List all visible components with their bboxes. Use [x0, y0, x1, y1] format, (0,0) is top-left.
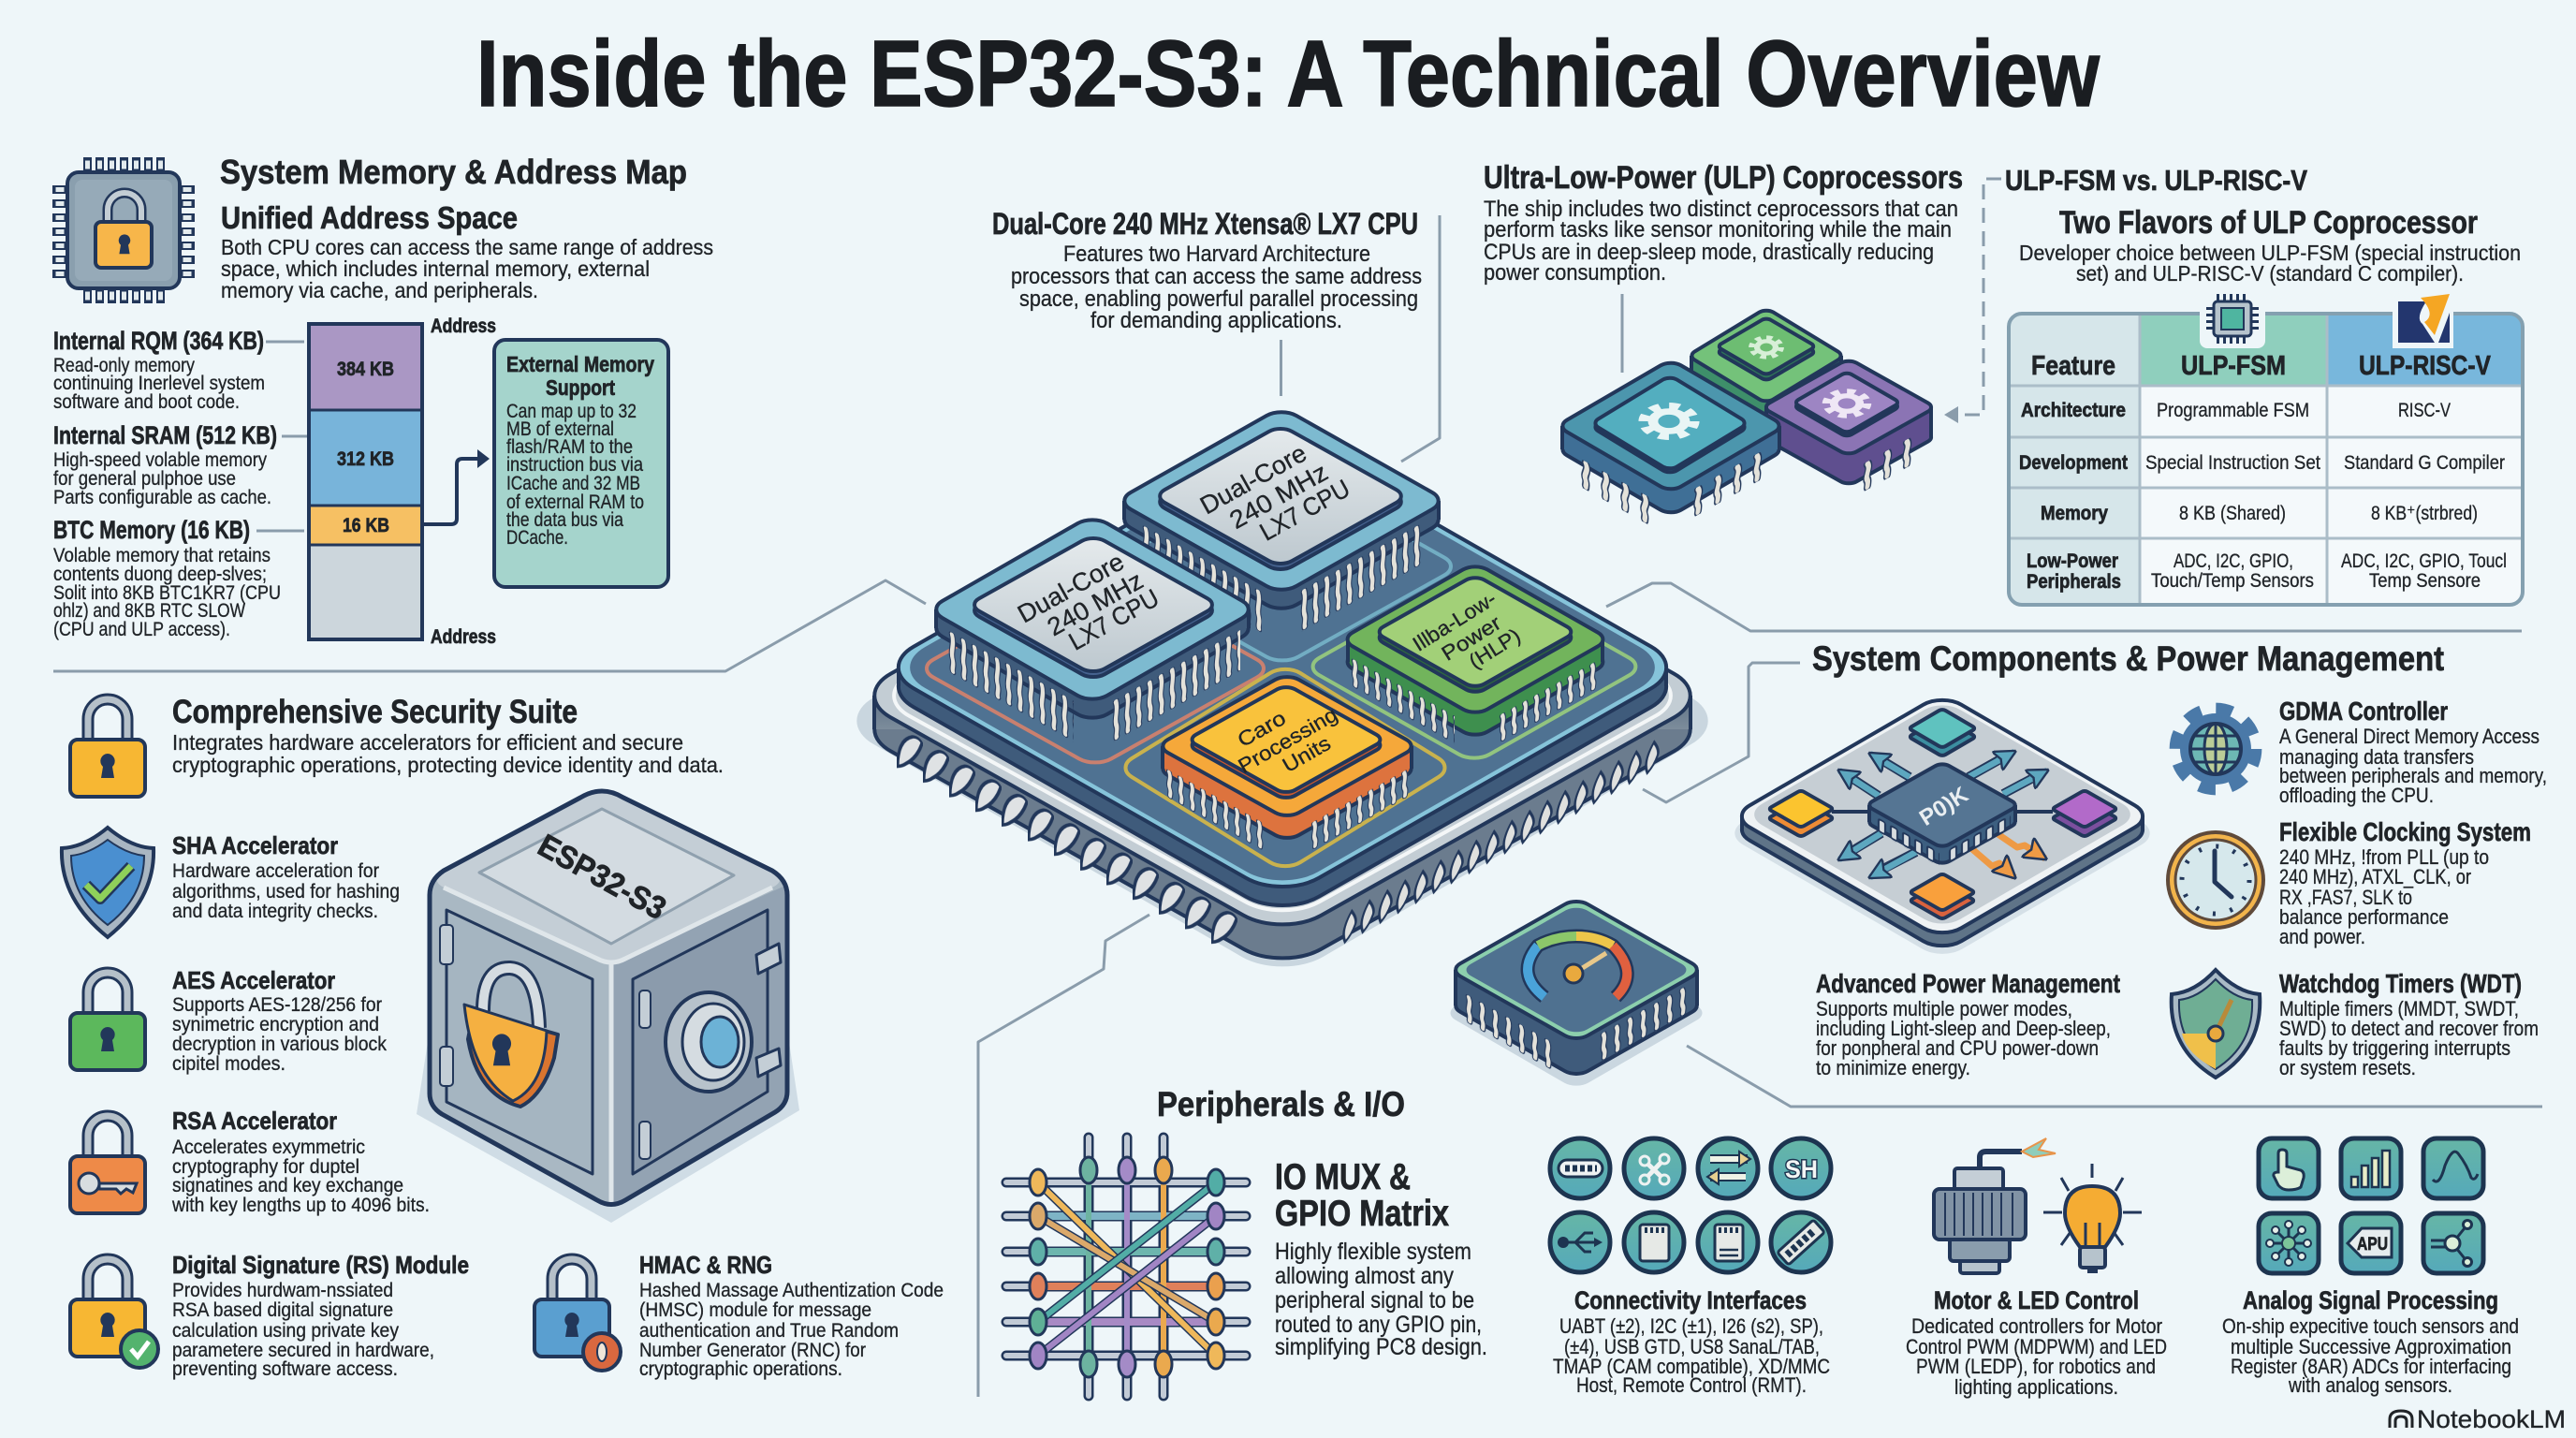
text block: GDMA controller: GDMA Controller [2279, 697, 2448, 726]
text block: RSA accelerator: RSA Accelerator [172, 1107, 337, 1135]
icons: analog signal processing: APU [2357, 1235, 2388, 1255]
text block: analog signal processing: multiple Successive Agproximation [2231, 1335, 2511, 1358]
label: internal ROM: Read-only memory [53, 355, 195, 376]
text block: advanced power management: to minimize energy. [1816, 1056, 1970, 1079]
callout: external memory support: of external RAM to [506, 492, 644, 513]
icon: AES padlock [70, 973, 145, 1070]
text block: RSA accelerator: with key lengths up to 4096 bits. [171, 1195, 430, 1216]
subheading: Two Flavors of ULP Coprocessor [2059, 205, 2478, 241]
text block: intro: memory via cache, and peripherals. [221, 278, 538, 302]
text block: RSA accelerator [171, 1107, 430, 1216]
label: internal SRAM [53, 421, 307, 508]
text block: AES accelerator: decryption in various block [172, 1034, 387, 1055]
text block: CPUs are in deep-sleep mode, drastically reducing [1484, 240, 1934, 265]
label: RTC memory: BTC Memory (16 KB) [53, 516, 250, 544]
comparison table: 8 KB (Shared) [2179, 503, 2286, 524]
connector: memory section to main chip [53, 580, 926, 671]
panel: security suite [62, 694, 944, 1380]
comparison table: Programmable FSM [2157, 400, 2309, 421]
icon: clock [2168, 832, 2263, 928]
connector: CPU heading to main chip [1401, 215, 1440, 462]
callout: external memory support: Support [546, 375, 615, 400]
comparison table [2009, 314, 2523, 605]
text block: motor and LED control: lighting applications. [1954, 1375, 2118, 1399]
callout: external memory support [494, 340, 668, 587]
icon: RISC-V logo [2393, 294, 2453, 348]
chip: core processing units: Units [1279, 731, 1335, 777]
text block: IO MUX and GPIO matrix: routed to any GPIO pin, [1275, 1312, 1482, 1338]
text block: watchdog timers: faults by triggering interrupts [2279, 1036, 2510, 1060]
text block: AES accelerator: synimetric encryption and [172, 1014, 379, 1035]
text block: connectivity interfaces: Connectivity Interfaces [1574, 1286, 1807, 1314]
text block: SHA accelerator [172, 831, 400, 922]
text block: analog signal processing [2222, 1286, 2519, 1397]
text block: digital signature module: parametere secured in hardware, [172, 1340, 434, 1361]
callout: external memory support: Can map up to 32 [506, 401, 637, 422]
branding: NotebookLM: NotebookLM [2417, 1405, 2566, 1433]
text block: HMAC and RNG: HMAC & RNG [639, 1251, 772, 1279]
illustration: ESP32-S3 safe: ESP32-S3 [532, 828, 672, 927]
text block: intro: cryptographic operations, protecting device identity and data. [172, 753, 724, 777]
arrow: RTC memory to external memory [422, 449, 490, 524]
text block: digital signature module: RSA based digital signature [172, 1299, 393, 1321]
text block: IO MUX and GPIO matrix [1275, 1157, 1487, 1360]
panel: system components and power management [1443, 639, 2547, 1090]
text block: IO MUX and GPIO matrix: allowing almost any [1275, 1263, 1454, 1289]
text block: connectivity interfaces: TMAP (CAM compatible), XD/MMC [1553, 1355, 1830, 1378]
text block: for demanding applications. [1090, 308, 1342, 333]
text block: AES accelerator [172, 966, 387, 1075]
text block: perform tasks like sensor monitoring while the main [1484, 217, 1952, 242]
icon: motor [1934, 1138, 2056, 1273]
callout: external memory support: MB of external [506, 418, 614, 440]
text block: GDMA controller: A General Direct Memory Access [2279, 725, 2539, 748]
text block: Developer choice between ULP-FSM (special instruction [2019, 241, 2521, 265]
text block: analog signal processing: Register (8AR) ADCs for interfacing [2231, 1355, 2511, 1378]
chip: power management gauge [1443, 898, 1709, 1090]
heading: System Memory & Address Map [220, 153, 687, 191]
icon: digital signature padlock [70, 1259, 158, 1368]
text block: HMAC and RNG: (HMSC) module for message [639, 1299, 871, 1321]
chip: green ULP [1688, 308, 1845, 443]
label: RTC memory: Volable memory that retains [53, 545, 271, 566]
connector: main chip to peripherals [978, 915, 1149, 1397]
heading: ULP-FSM vs. ULP-RISC-V [2005, 164, 2307, 197]
callout: external memory support: instruction bus via [506, 454, 643, 476]
text block [2019, 241, 2521, 286]
text block: analog signal processing: Analog Signal Processing [2243, 1286, 2498, 1314]
icon: SHA shield [62, 828, 154, 937]
panel: ULP-FSM vs ULP-RISC-V [1944, 164, 2523, 605]
text block: motor and LED control [1906, 1286, 2167, 1399]
label: internal SRAM: Parts configurable as cache. [53, 487, 271, 508]
icon: HMAC padlock [534, 1259, 621, 1371]
circuit board plate [877, 436, 1688, 917]
chip: back CPU core: LX7 CPU [1255, 474, 1354, 547]
comparison table: ULP-FSM [2181, 351, 2286, 381]
heading: Dual-Core 240 MHz Xtensa® LX7 CPU [992, 207, 1418, 241]
callout: external memory support: the data bus via [506, 509, 623, 531]
text block: IO MUX and GPIO matrix: simplifying PC8 design. [1275, 1334, 1487, 1360]
comparison table: ADC, I2C, GPIO, Toucl [2341, 550, 2507, 572]
text block: RSA accelerator: Accelerates exymmetric [172, 1137, 365, 1158]
text block: advanced power management [1816, 969, 2120, 1079]
illustration: central ESP32-S3 chip package [833, 407, 1732, 980]
chip: back CPU core: 240 MHz [1224, 458, 1333, 535]
comparison table: Architecture [2021, 400, 2126, 421]
label: internal SRAM: for general pulphoe use [53, 468, 236, 490]
label: internal SRAM: High-speed volable memory [53, 449, 267, 471]
panel: CPU description [992, 207, 1422, 333]
text block: advanced power management: for ponpheral and CPU power-down [1816, 1036, 2099, 1060]
icon: watchdog shield [2172, 970, 2260, 1078]
text block: HMAC and RNG: Number Generator (RNC) for [639, 1340, 866, 1361]
text block: HMAC and RNG: Hashed Massage Authentization Code [639, 1280, 944, 1301]
heading: Peripherals & I/O [1157, 1085, 1405, 1123]
chip: ultra-low-power [1340, 563, 1610, 744]
connector: main chip to system components divider [1606, 583, 2522, 631]
heading: System Components & Power Management [1812, 639, 2444, 678]
chart: memory map bar [309, 315, 496, 648]
chip: front CPU core: 240 MHz [1043, 566, 1148, 641]
comparison table: ULP-RISC-V [2359, 351, 2492, 381]
text block: motor and LED control: Motor & LED Control [1934, 1286, 2139, 1314]
text block: AES accelerator: AES Accelerator [172, 966, 335, 994]
text block: GDMA controller: offloading the CPU. [2279, 784, 2434, 807]
connector: gauge chip to bottom divider [1687, 1046, 2542, 1107]
comparison table: 8 KB⁺(strbred) [2371, 503, 2478, 524]
callout: external memory support: ICache and 32 MB [506, 473, 640, 494]
icon: ULP-FSM chip [2200, 290, 2265, 348]
text block: RSA accelerator: cryptography for duptel [172, 1156, 359, 1178]
chip: front CPU core [928, 515, 1257, 743]
text block: HMAC and RNG [639, 1251, 944, 1380]
title: Inside the ESP32-S3: A Technical Overview [476, 22, 2100, 126]
icons: connectivity interfaces: SH [1785, 1155, 1818, 1183]
chip: ultra-low-power: Illba-Low- [1409, 586, 1500, 656]
text block: motor and LED control: PWM (LEDP), for robotics and [1916, 1355, 2156, 1378]
illustration: GDMA bus board: P0)K [1915, 782, 1973, 831]
chart: memory map bar: 384 KB [337, 359, 394, 380]
icon: RSA padlock with key [70, 1116, 145, 1213]
chip: core processing units: Caro [1234, 706, 1290, 752]
text block: motor and LED control: Dedicated controllers for Motor [1911, 1314, 2162, 1338]
chip: purple ULP [1762, 359, 1936, 494]
chip: front CPU core: LX7 CPU [1064, 583, 1164, 656]
label: internal SRAM: Internal SRAM (512 KB) [53, 421, 277, 449]
text block: power consumption. [1484, 260, 1666, 286]
text block: flexible clocking system: balance performance [2279, 905, 2449, 929]
comparison table: Development [2019, 452, 2128, 474]
label: RTC memory [53, 516, 304, 640]
comparison table: Memory [2041, 503, 2108, 524]
label: RTC memory: contents duong deep-slves; [53, 564, 267, 585]
text block: connectivity interfaces: UABT (±2), I2C (±1), I26 (s2), SP), [1559, 1314, 1823, 1338]
chart: memory map bar: Address [431, 315, 496, 337]
text block: connectivity interfaces [1553, 1286, 1830, 1397]
text block: advanced power management: Advanced Power Management [1816, 969, 2120, 998]
package base [833, 454, 1732, 980]
text block: watchdog timers: SWD) to detect and recover from [2279, 1017, 2539, 1040]
callout: external memory support: flash/RAM to the [506, 436, 633, 458]
text block: SHA accelerator: and data integrity checks. [172, 901, 378, 922]
text block: AES accelerator: cipitel modes. [172, 1053, 285, 1075]
text block: GDMA controller [2279, 697, 2547, 807]
text block: digital signature module: Provides hurdwam-nssiated [172, 1280, 393, 1301]
icon: GDMA gear and globe [2178, 712, 2253, 786]
connector: CPU text to chip [1280, 340, 1282, 396]
chip: ultra-low-power: (HLP) [1465, 624, 1525, 673]
chip: front CPU core: Dual-Core [1013, 548, 1129, 628]
label: internal ROM: Internal RQM (364 KB) [53, 327, 264, 355]
text block: flexible clocking system [2279, 817, 2531, 948]
text block: digital signature module: calculation using private key [172, 1320, 399, 1342]
comparison table: Low-Power [2027, 550, 2118, 572]
text block: The ship includes two distinct ceprocessors that can [1484, 197, 1958, 222]
callout: external memory support: External Memory [506, 352, 654, 376]
comparison table: Touch/Temp Sensors [2151, 570, 2314, 592]
chip: core processing units [1156, 673, 1418, 853]
label: RTC memory: (CPU and ULP access). [53, 619, 230, 640]
comparison table: Temp Sensore [2369, 570, 2481, 592]
icon: yellow padlock [70, 699, 145, 797]
icon: IO MUX matrix [1006, 1137, 1246, 1396]
text block: AES accelerator: Supports AES-128/256 for [172, 994, 382, 1016]
text block: watchdog timers: Multiple fimers (MMDT, SWDT, [2279, 997, 2519, 1020]
label: RTC memory: ohlz) and 8KB RTC SLOW [53, 600, 245, 622]
callout: external memory support: DCache. [506, 527, 568, 549]
heading: Comprehensive Security Suite [172, 694, 578, 730]
text block: intro [172, 730, 724, 777]
illustration: ESP32-S3 safe [417, 791, 799, 1223]
text block: RSA accelerator: signatines and key exchange [172, 1175, 403, 1196]
text block: analog signal processing: with analog sensors. [2288, 1373, 2452, 1397]
chip: ultra-low-power: Power [1437, 610, 1505, 666]
connector: system components bracket [1643, 663, 1800, 802]
text block [1011, 242, 1422, 333]
text block: Features two Harvard Architecture [1063, 242, 1370, 267]
text block: intro: Integrates hardware accelerators for efficient and secure [172, 730, 683, 755]
comparison table: Peripherals [2027, 571, 2121, 593]
text block: advanced power management: including Light-sleep and Deep-sleep, [1816, 1017, 2111, 1040]
chip: back CPU core [1116, 407, 1447, 633]
text block: SHA accelerator: algorithms, used for hashing [172, 881, 400, 902]
comparison table: Special Instruction Set [2145, 452, 2320, 474]
text block: GDMA controller: managing data transfers [2279, 745, 2474, 769]
arrow: comparison to ULP chips [1944, 179, 2001, 423]
heading: Ultra-Low-Power (ULP) Coprocessors [1484, 160, 1963, 196]
panel: system memory and address map [53, 153, 713, 648]
comparison table: ADC, I2C, GPIO, [2174, 550, 2293, 572]
chart: memory map bar: 312 KB [337, 448, 394, 470]
text block: set) and ULP-RISC-V (standard C compiler). [2076, 261, 2464, 286]
chart: memory map bar: Address [431, 626, 496, 648]
text block: IO MUX and GPIO matrix: IO MUX & [1275, 1157, 1411, 1197]
label: RTC memory: Solit into 8KB BTC1KR7 (CPU [53, 582, 281, 604]
text block: intro: space, which includes internal memory, external [221, 257, 650, 281]
text block: connectivity interfaces: Host, Remote Control (RMT). [1576, 1373, 1807, 1397]
text block: HMAC and RNG: authentication and True Random [639, 1320, 899, 1342]
icons: connectivity interfaces [1550, 1138, 1831, 1272]
text block: intro [221, 235, 713, 302]
label: internal ROM: software and boot code. [53, 391, 240, 413]
icon: LED bulb [2043, 1164, 2142, 1273]
text block: digital signature module: preventing software access. [172, 1358, 398, 1380]
text block: analog signal processing: On-ship expecitive touch sensors and [2222, 1314, 2519, 1338]
icons: analog signal processing [2259, 1138, 2483, 1273]
text block: watchdog timers [2279, 969, 2539, 1079]
text block: IO MUX and GPIO matrix: GPIO Matrix [1275, 1194, 1449, 1234]
text block: flexible clocking system: and power. [2279, 925, 2365, 948]
panel: ULP coprocessors [1484, 160, 1963, 529]
text block: intro: Both CPU cores can access the same range of address [221, 235, 713, 259]
comparison table: Feature [2031, 351, 2115, 381]
text block: processors that can access the same address [1011, 264, 1422, 289]
text block: flexible clocking system: 240 MHz, !from PLL (up to [2279, 845, 2489, 869]
label: internal ROM [53, 327, 304, 413]
text block: watchdog timers: or system resets. [2279, 1056, 2416, 1079]
comparison table: Standard G Compiler [2344, 452, 2505, 474]
illustration: GDMA bus board [1723, 694, 2161, 961]
text block: SHA accelerator: Hardware acceleration for [172, 860, 379, 882]
label: internal ROM: continuing Inerlevel system [53, 373, 265, 394]
text block: connectivity interfaces: (±4), USB GTD, US8 SanaL/TAB, [1564, 1335, 1820, 1358]
text block: flexible clocking system: RX ,FAS7, SLK to [2279, 886, 2412, 909]
text block: digital signature module [172, 1251, 469, 1380]
panel: peripherals and I/O [1006, 1085, 2519, 1399]
text block: flexible clocking system: 240 MHz), ATXL_CLK, or [2279, 865, 2471, 888]
text block: digital signature module: Digital Signature (RS) Module [172, 1251, 469, 1279]
chart: memory map bar: 16 KB [343, 515, 389, 536]
chip: back CPU core: Dual-Core [1195, 439, 1311, 520]
text block [1484, 197, 1958, 286]
text block: SHA accelerator: SHA Accelerator [172, 831, 338, 859]
comparison table: RISC-V [2398, 400, 2451, 421]
text block: advanced power management: Supports multiple power modes, [1816, 997, 2072, 1020]
connector: ULP text to ULP chips [1621, 294, 1623, 373]
subheading: Unified Address Space [221, 200, 518, 235]
text block: IO MUX and GPIO matrix: peripheral signal to be [1275, 1287, 1474, 1313]
text block: space, enabling powerful parallel processing [1019, 286, 1418, 312]
chip: core processing units: Processing [1234, 702, 1341, 778]
text block: IO MUX and GPIO matrix: Highly flexible system [1275, 1239, 1471, 1265]
chip: blue ULP [1557, 360, 1785, 529]
icon: chip with padlock [60, 165, 187, 296]
text block: HMAC and RNG: cryptographic operations. [639, 1358, 842, 1380]
text block: watchdog timers: Watchdog Timers (WDT) [2279, 969, 2522, 998]
text block: motor and LED control: Control PWM (MDPWM) and LED [1906, 1335, 2167, 1358]
